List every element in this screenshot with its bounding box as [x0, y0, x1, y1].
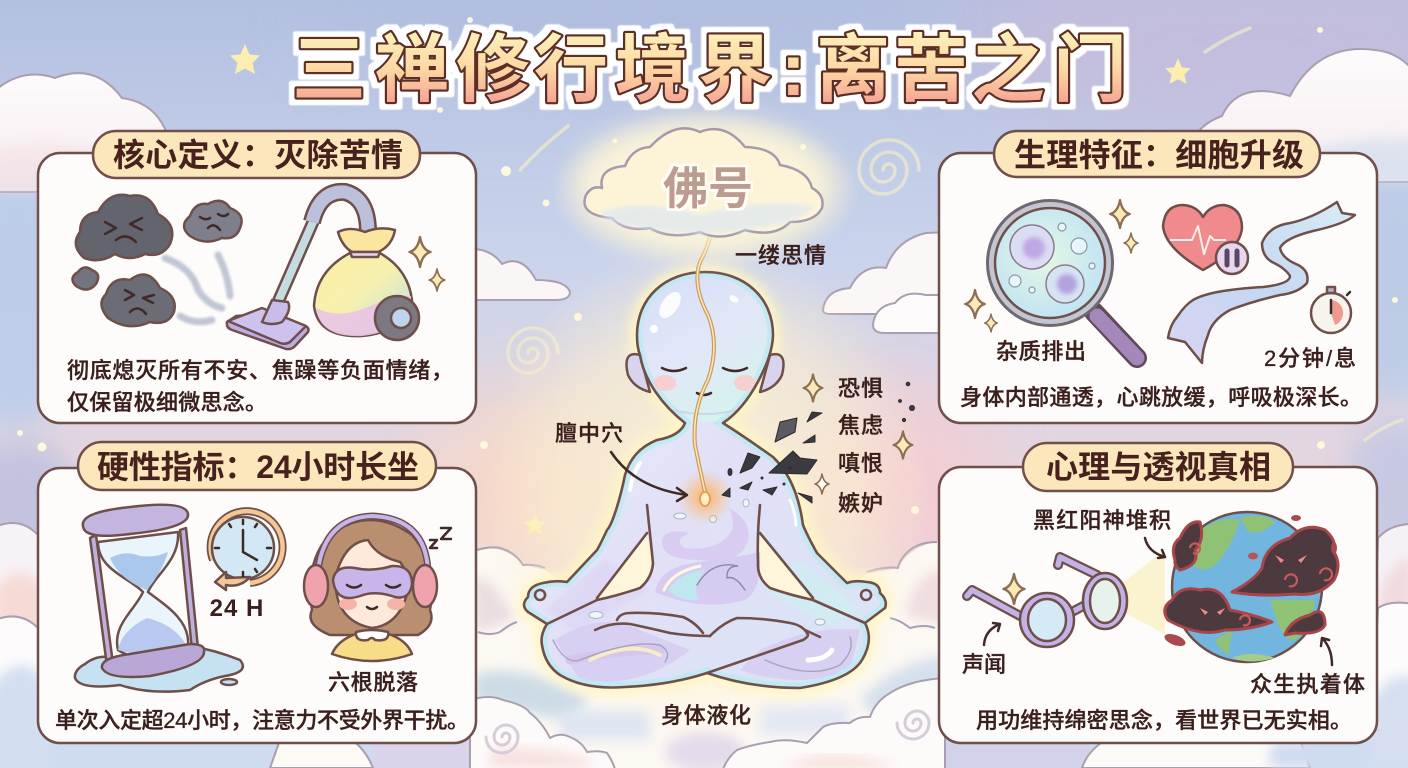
icon: heart with pause [1163, 205, 1248, 274]
panel: core definition [38, 131, 476, 423]
shattered negative emotions [722, 374, 914, 503]
text block: core definition [67, 358, 453, 415]
figure arm gaps [597, 533, 813, 598]
icon: round glasses [967, 557, 1127, 647]
label: 24 H: 24 H [210, 595, 264, 622]
label: accumulated dark red yang spirit: 黑红阳神堆积 [1033, 508, 1171, 533]
figure inner flowing waves [553, 463, 851, 671]
text block: core definition: 彻底熄灭所有不安、焦躁等负面情绪， [67, 358, 453, 383]
labels: negative emotions [838, 376, 883, 516]
cloud: Buddha's name [574, 119, 834, 251]
panel: hard metric [38, 442, 476, 743]
cloud label: 佛号 [663, 163, 753, 214]
clouds: middle right [823, 232, 950, 333]
icon: clock with return arrow [211, 511, 283, 590]
icon: stopwatch [1311, 287, 1351, 333]
heart point glow [677, 469, 733, 525]
heading pill: physiological features: 生理特征：细胞升级 [1014, 137, 1304, 173]
clouds: top right [1185, 49, 1408, 182]
figure body contour lines [535, 505, 871, 673]
central glow [481, 110, 931, 740]
text block: hard metric: 单次入定超24小时，注意力不受外界干扰。 [55, 708, 469, 733]
label: a wisp of thought: 一缕思情 [735, 243, 826, 268]
figure ears [626, 354, 784, 392]
icon: magnifier with cells [986, 199, 1137, 358]
label: six roots falling away: 六根脱落 [328, 670, 418, 695]
text block: core definition: 仅保留极细微思念。 [67, 390, 267, 415]
labels: negative emotions: 嫉妒 [838, 491, 883, 516]
labels: negative emotions: 嗔恨 [838, 451, 883, 476]
figure: liquefied meditating body [524, 212, 886, 688]
figure head highlights and face [650, 288, 756, 414]
label: body liquefied: 身体液化 [661, 703, 751, 728]
icon: girl with sleep mask and earmuffs [304, 516, 451, 661]
icon: sparkles [410, 237, 445, 291]
arrow: to the glasses [984, 623, 1000, 645]
clouds: left edge [0, 523, 50, 768]
text block: psychology and perception: 用功维持绵密思念，看世界已无实相。 [976, 708, 1352, 733]
title: 三禅修行境界:离苦之门 [292, 28, 1127, 111]
arrow: to acupoint [611, 452, 687, 501]
icon: melting hourglass [75, 505, 243, 692]
label: impurities expelled: 杂质排出 [996, 339, 1086, 364]
label: hearer: 声闻 [962, 652, 1006, 677]
arrow: to the dark cloud [1321, 638, 1332, 665]
labels: negative emotions: 恐惧 [838, 376, 883, 401]
labels: negative emotions: 焦虑 [838, 413, 883, 438]
figure tints [524, 272, 886, 688]
heading pill: hard metric [78, 442, 436, 490]
figure outline [524, 272, 886, 688]
heading pill: core definition [93, 131, 420, 178]
icon: sparkles [965, 200, 1138, 332]
heading pill: psychology and perception [1023, 443, 1293, 491]
icon: dark emotion clouds [72, 195, 242, 326]
heading pill: psychology and perception: 心理与透视真相 [1046, 449, 1271, 485]
label: two minutes per breath: 2分钟/息 [1264, 346, 1356, 371]
heading pill: hard metric: 硬性指标：24小时长坐 [97, 449, 419, 485]
heading pill: core definition: 核心定义：灭除苦情 [113, 137, 403, 173]
icon: breath ribbon [1168, 202, 1355, 363]
clouds: bottom center [470, 540, 945, 768]
label: attachment body of beings: 众生执着体 [1250, 672, 1365, 697]
panel: psychology and perception [939, 443, 1377, 743]
swirls and sparkle decoration [17, 17, 1402, 535]
golden thread of thought [695, 212, 714, 506]
figure silhouette [524, 272, 886, 688]
clouds: top left [0, 73, 172, 192]
icon: earth with attachment clouds [1163, 512, 1338, 662]
panel: physiological features [939, 131, 1377, 423]
arrow: to the globe [1145, 538, 1165, 558]
clouds: right edge [1372, 524, 1408, 768]
text block: physiological features: 身体内部通透，心跳放缓，呼吸极深长。 [960, 385, 1362, 410]
clouds: middle left [465, 249, 570, 300]
ground strip below the panels [0, 700, 1408, 768]
icon: vacuum cleaner [227, 192, 419, 349]
label: Danzhong acupoint: 膻中穴 [555, 421, 623, 446]
icon: vision beam [1100, 550, 1165, 634]
heading pill: physiological features [994, 131, 1320, 177]
